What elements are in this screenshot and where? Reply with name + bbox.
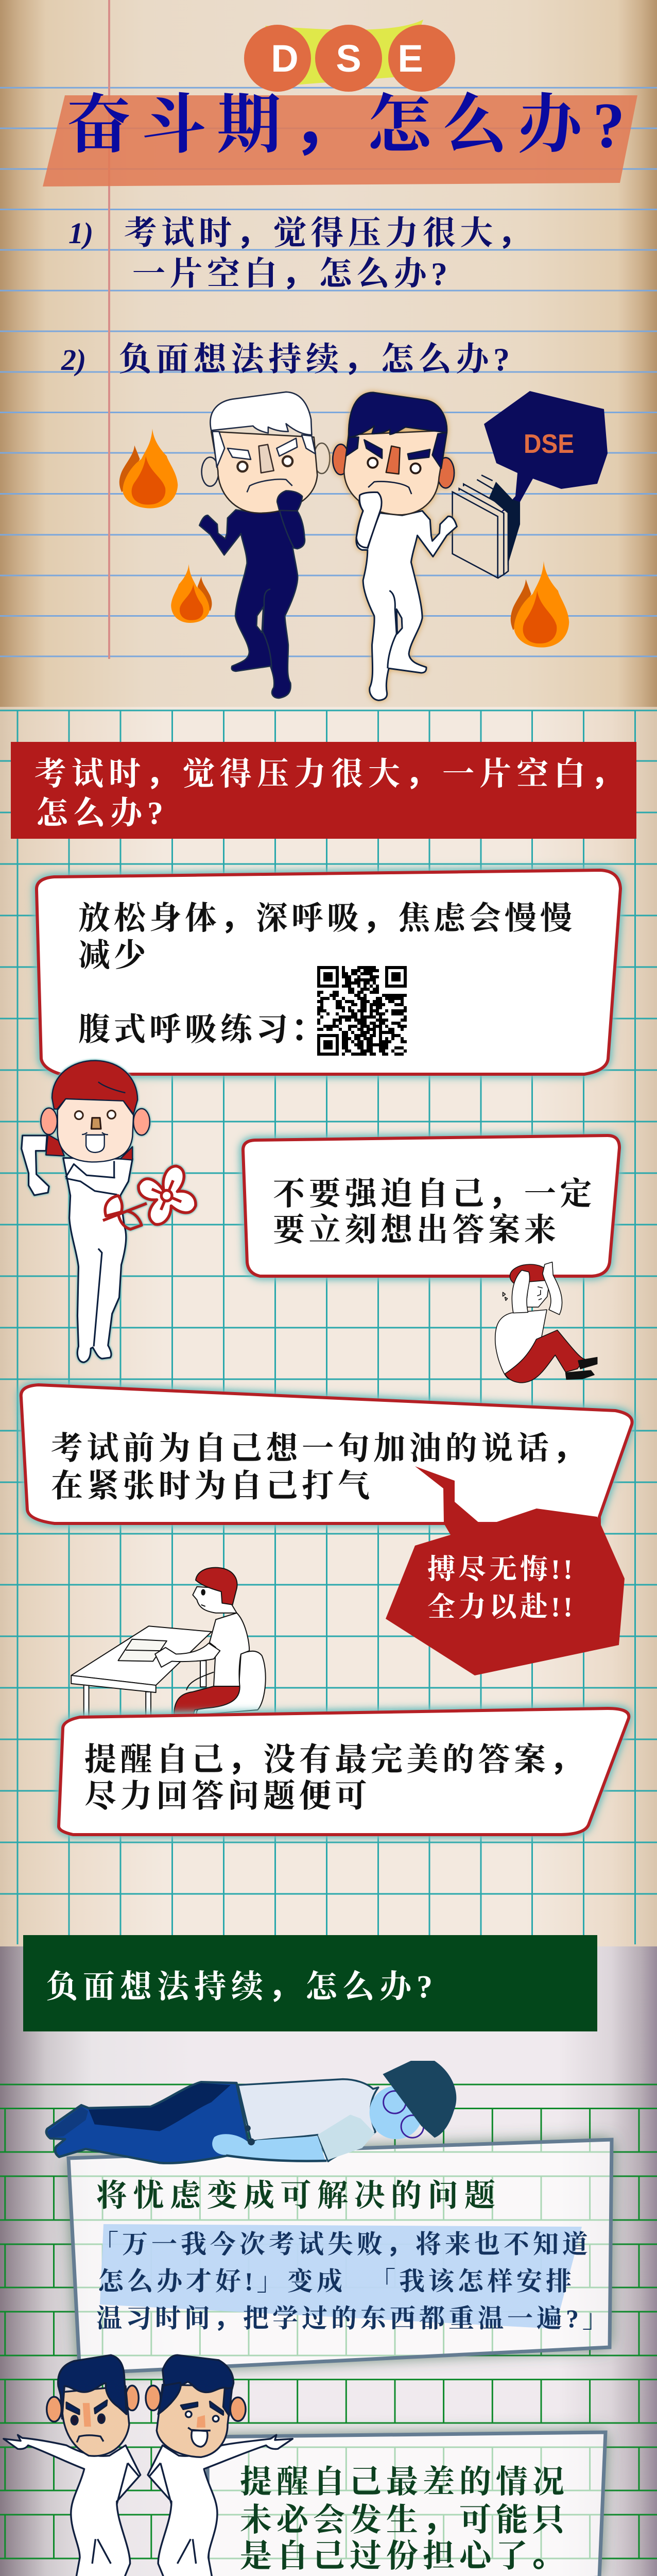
questions list: 考试时，觉得压力很大，: [124, 207, 534, 254]
illustration: two worried students with exam papers: [199, 392, 520, 700]
questions list: [61, 207, 534, 380]
exam folders: [453, 475, 520, 578]
DSE badge: S: [336, 37, 361, 80]
DSE badge: E: [397, 37, 423, 80]
section 1 background: lined paper: [0, 0, 657, 707]
QR code: breathing exercise: [317, 968, 407, 1054]
illustration: relaxed girl holding flower: [22, 1061, 196, 1362]
callout: don't force yourself: 要立刻想出答案来: [273, 1212, 560, 1248]
speech burst: DSE: [484, 391, 608, 513]
icon: flower: [103, 1166, 196, 1229]
illustration: stressed student holding head: [495, 1262, 597, 1383]
speech burst: cheer slogan: [386, 1466, 625, 1675]
red section heading: [11, 742, 636, 839]
panel: worst case may not happen: 提醒自己最差的情况: [240, 2465, 569, 2500]
questions list: 负面想法持续，怎么办?: [118, 333, 514, 380]
callout: no perfect answer: 提醒自己，没有最完美的答案，: [84, 1733, 585, 1780]
right twin: [146, 2355, 292, 2576]
panel: turn worry into solvable problem: 温习时间，把学过的东西都重温一遍?」: [96, 2298, 612, 2335]
callout: no perfect answer: 尽力回答问题便可: [84, 1778, 371, 1814]
callout: relax and breathe: [37, 870, 620, 1074]
illustration: twin students pointing: [4, 2355, 292, 2576]
red section heading: 考试时，觉得压力很大，一片空白，: [34, 748, 628, 794]
callout: words of encouragement: 考试前为自己想一句加油的说话，: [51, 1422, 589, 1468]
illustration: student lying on the panel: [46, 2061, 456, 2163]
callout: relax and breathe: 减少: [78, 938, 149, 973]
questions list: 一片空白，怎么办?: [132, 247, 452, 295]
panel: turn worry into solvable problem: 「我该怎样安排: [370, 2267, 575, 2296]
panel: worst case may not happen: 未必会发生，可能只: [240, 2494, 569, 2540]
callout: relax and breathe: 腹式呼吸练习：: [78, 1003, 327, 1049]
section 3 background: green brick grid: [0, 1946, 657, 2576]
callout: words of encouragement: [21, 1385, 632, 1523]
left twin: [4, 2355, 141, 2576]
speech burst: cheer slogan: 全力以赴!!: [427, 1591, 576, 1622]
speech burst: DSE: DSE: [524, 429, 574, 459]
green section heading: 负面想法持续，怎么办?: [46, 1960, 438, 2007]
panel: turn worry into solvable problem: 将忧虑变成可解决的问题: [96, 2179, 502, 2213]
questions list: 2): [61, 343, 86, 377]
callout: don't force yourself: [243, 1136, 619, 1276]
questions list: 1): [68, 216, 93, 250]
head: navy-haired student: [333, 393, 454, 548]
panel: turn worry into solvable problem: 变成: [287, 2267, 346, 2296]
red section heading: 怎么办?: [36, 795, 168, 831]
DSE badge: D: [271, 37, 299, 80]
green section heading: [23, 1935, 597, 2031]
panel: worst case may not happen: 是自己过份担心了。: [240, 2530, 569, 2576]
callout: don't force yourself: 不要强迫自己，一定: [273, 1167, 596, 1214]
icon: flames: [119, 429, 569, 648]
DSE badge: [244, 20, 455, 92]
student: navy suit: [199, 491, 305, 698]
panel: turn worry into solvable problem: 怎么办才好!」: [98, 2267, 286, 2296]
callout: relax and breathe: 放松身体，深呼吸，焦虑会慢慢: [78, 892, 576, 938]
head: grey-haired student: [202, 392, 330, 513]
panel: turn worry into solvable problem: 「万一我今次考试失败，将来也不知道: [93, 2224, 592, 2261]
panel: turn worry into solvable problem: [68, 2140, 612, 2374]
student: white suit: [333, 393, 457, 700]
illustration: student at exam desk: [71, 1568, 266, 1720]
panel: worst case may not happen: [208, 2432, 606, 2576]
callout: no perfect answer: [59, 1708, 629, 1835]
title band: [43, 95, 637, 187]
callout: words of encouragement: 在紧张时为自己打气: [51, 1469, 373, 1504]
section 2 background: teal grid paper: [0, 707, 657, 1946]
speech burst: cheer slogan: 搏尽无悔!!: [427, 1554, 576, 1585]
title: 奋斗期，怎么办?: [66, 72, 635, 165]
